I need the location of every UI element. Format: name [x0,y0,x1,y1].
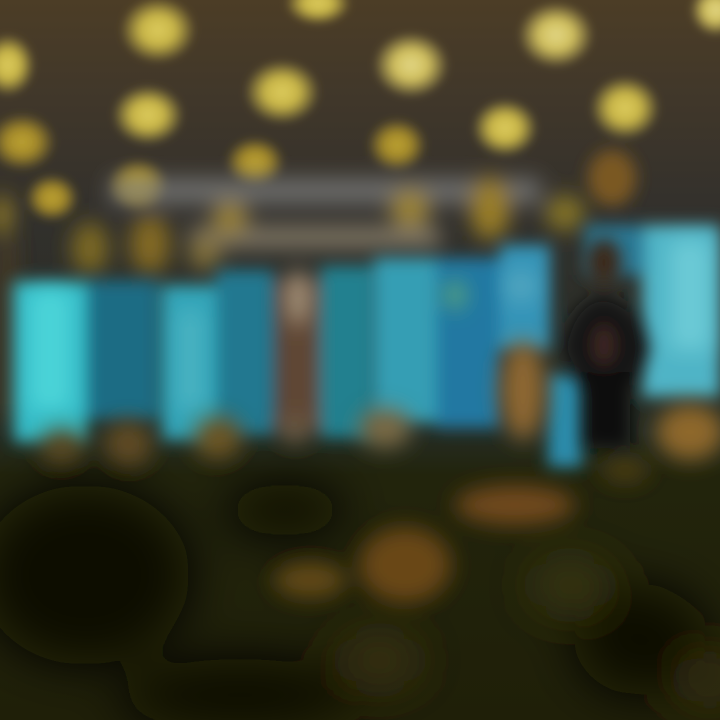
stage screens [14,225,720,467]
foreground silhouette tops [40,340,720,469]
audience heads [274,458,649,603]
presenter [562,150,650,448]
audience foreground [0,484,720,720]
ceiling lights [0,0,720,222]
banner: pale strip [0,176,585,420]
screen highlights [30,240,710,410]
